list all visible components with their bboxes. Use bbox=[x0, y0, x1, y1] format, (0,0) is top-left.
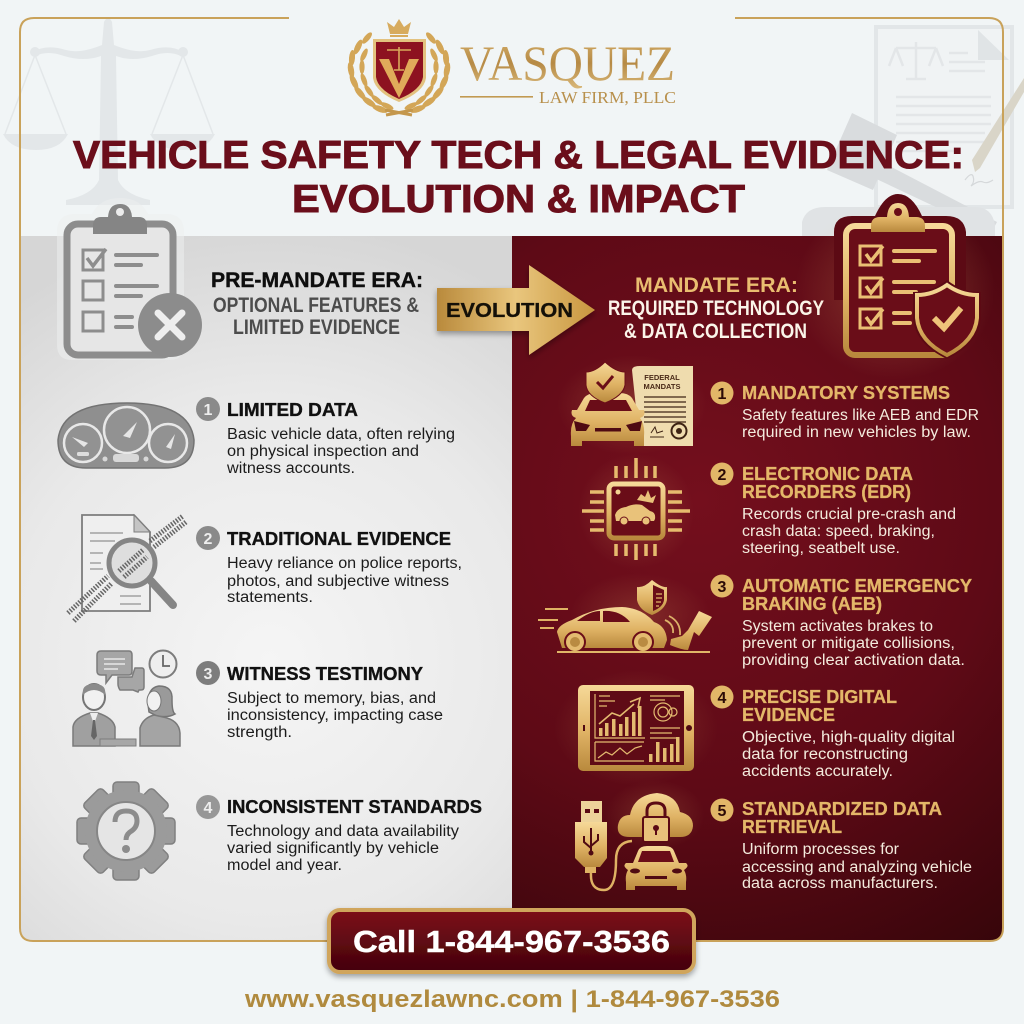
body text bbox=[742, 729, 955, 780]
icon: tablet with charts bbox=[554, 670, 718, 786]
right header bbox=[608, 274, 824, 343]
body text: Safety features like AEB and EDR bbox=[742, 407, 979, 424]
right header: MANDATE ERA: bbox=[635, 274, 798, 297]
body text: crash data: speed, braking, bbox=[742, 523, 935, 540]
badge 4 bbox=[196, 795, 220, 819]
panel: pre-mandate era bbox=[21, 236, 512, 941]
body text: on physical inspection and bbox=[227, 443, 419, 460]
body text: steering, seatbelt use. bbox=[742, 540, 900, 557]
body text bbox=[227, 823, 459, 874]
heading: WITNESS TESTIMONY bbox=[227, 663, 424, 684]
body text: data for reconstructing bbox=[742, 746, 908, 763]
body text: Heavy reliance on police reports, bbox=[227, 555, 462, 572]
body text: varied significantly by vehicle bbox=[227, 840, 439, 857]
badge 1 bbox=[710, 382, 734, 404]
body text: data across manufacturers. bbox=[742, 875, 938, 892]
right header: REQUIRED TECHNOLOGY bbox=[608, 297, 824, 320]
heading: RECORDERS (EDR) bbox=[742, 481, 911, 502]
badge 1: 1 bbox=[718, 386, 727, 403]
badge 3: 3 bbox=[718, 579, 727, 596]
logo bbox=[347, 19, 676, 115]
item: precise digital evidence bbox=[554, 670, 955, 786]
heading: ELECTRONIC DATA bbox=[742, 463, 913, 484]
body text: accessing and analyzing vehicle bbox=[742, 859, 972, 876]
body text: witness accounts. bbox=[226, 460, 355, 477]
badge 2 bbox=[710, 462, 734, 486]
heading bbox=[742, 575, 973, 614]
logo wreath bbox=[347, 31, 451, 115]
heading: STANDARDIZED DATA bbox=[742, 798, 942, 819]
badge 3 bbox=[710, 574, 734, 598]
left header: PRE-MANDATE ERA: bbox=[211, 269, 423, 292]
logo name: VASQUEZ bbox=[460, 35, 675, 91]
badge 4: 4 bbox=[204, 800, 213, 817]
body text bbox=[742, 407, 979, 441]
badge 3: 3 bbox=[204, 666, 213, 683]
badge 4 bbox=[710, 686, 734, 708]
logo firm line: LAW FIRM, PLLC bbox=[539, 88, 676, 107]
body text bbox=[742, 506, 956, 557]
body text: Uniform processes for bbox=[742, 841, 899, 858]
logo shield bbox=[373, 39, 426, 102]
body text bbox=[742, 618, 965, 669]
logo crown bbox=[387, 19, 411, 37]
watermark: scales of justice bbox=[3, 18, 215, 205]
icon: car, shield, federal mandates document: FEDERAL bbox=[644, 373, 680, 382]
title: VEHICLE SAFETY TECH & LEGAL EVIDENCE: bbox=[73, 134, 964, 177]
item: automatic emergency braking bbox=[538, 573, 973, 669]
body text: photos, and subjective witness bbox=[227, 573, 449, 590]
badge 5 bbox=[710, 798, 734, 822]
body text: Technology and data availability bbox=[227, 823, 459, 840]
title: EVOLUTION & IMPACT bbox=[292, 178, 745, 221]
body text bbox=[226, 426, 455, 477]
icon: car braking with shield and pedal bbox=[538, 573, 712, 657]
watermark: legal document, gavel and pen bbox=[802, 27, 1024, 236]
icon: gear with question mark bbox=[77, 782, 175, 880]
heading: RETRIEVAL bbox=[742, 816, 842, 837]
heading bbox=[742, 686, 897, 725]
body text: accidents accurately. bbox=[742, 763, 893, 780]
icon: two people talking bbox=[73, 650, 180, 746]
body text: System activates brakes to bbox=[742, 618, 933, 635]
heading bbox=[742, 463, 913, 502]
item: inconsistent standards bbox=[77, 782, 482, 880]
item: electronic data recorders bbox=[578, 453, 956, 569]
heading: AUTOMATIC EMERGENCY bbox=[742, 575, 973, 596]
body text: model and year. bbox=[227, 857, 342, 874]
item: traditional evidence bbox=[68, 515, 462, 621]
left header: OPTIONAL FEATURES & bbox=[213, 294, 419, 317]
arrow: evolution bbox=[437, 265, 595, 355]
icon: car, shield, federal mandates document bbox=[557, 355, 707, 455]
badge 2 bbox=[196, 526, 220, 550]
item: standardized data retrieval bbox=[575, 780, 972, 892]
icon: USB, cloud lock and car bbox=[575, 780, 705, 890]
body text: providing clear activation data. bbox=[742, 652, 965, 669]
heading: LIMITED DATA bbox=[227, 399, 358, 420]
heading: TRADITIONAL EVIDENCE bbox=[227, 528, 451, 549]
badge 5: 5 bbox=[718, 803, 727, 820]
call button bbox=[329, 910, 694, 972]
heading bbox=[742, 798, 942, 837]
panel: mandate era bbox=[512, 236, 1003, 941]
body text bbox=[742, 841, 972, 892]
badge 1 bbox=[196, 397, 220, 421]
body text: prevent or mitigate collisions, bbox=[742, 635, 955, 652]
body text: Basic vehicle data, often relying bbox=[227, 426, 455, 443]
icon: document, magnifier, tire tracks bbox=[68, 515, 186, 621]
call button: Call 1-844-967-3536 bbox=[353, 924, 670, 959]
body text: inconsistency, impacting case bbox=[227, 707, 443, 724]
icon: gold clipboard with shield bbox=[795, 194, 995, 380]
heading: EVIDENCE bbox=[742, 704, 835, 725]
icon: grey clipboard with X bbox=[57, 198, 202, 360]
icon: car, shield, federal mandates document: MANDATS bbox=[644, 382, 680, 391]
logo rule bbox=[460, 96, 533, 98]
heading: PRECISE DIGITAL bbox=[742, 686, 897, 707]
icon: dashboard gauges bbox=[58, 403, 194, 468]
body text bbox=[227, 555, 462, 606]
right header: & DATA COLLECTION bbox=[624, 320, 807, 343]
body text bbox=[227, 690, 443, 741]
icon: EDR chip with crash car bbox=[578, 453, 694, 569]
heading: MANDATORY SYSTEMS bbox=[742, 382, 950, 403]
body text: strength. bbox=[227, 724, 292, 741]
body text: Subject to memory, bias, and bbox=[227, 690, 436, 707]
title bbox=[73, 134, 964, 221]
left header bbox=[211, 269, 423, 339]
badge 2: 2 bbox=[718, 467, 727, 484]
arrow: evolution: EVOLUTION bbox=[446, 299, 573, 322]
badge 1: 1 bbox=[204, 402, 213, 419]
footer contact line: www.vasquezlawnc.com | 1-844-967-3536 bbox=[244, 986, 780, 1013]
heading: INCONSISTENT STANDARDS bbox=[227, 796, 482, 817]
body text: Records crucial pre-crash and bbox=[742, 506, 956, 523]
item: limited data bbox=[58, 397, 455, 477]
badge 2: 2 bbox=[204, 531, 213, 548]
body text: required in new vehicles by law. bbox=[742, 424, 971, 441]
badge 4: 4 bbox=[718, 690, 727, 707]
heading: BRAKING (AEB) bbox=[742, 593, 882, 614]
badge 3 bbox=[196, 661, 220, 685]
body text: Objective, high-quality digital bbox=[742, 729, 955, 746]
item: witness testimony bbox=[73, 650, 443, 746]
left header: LIMITED EVIDENCE bbox=[233, 316, 400, 339]
item: mandatory systems bbox=[557, 355, 979, 455]
body text: statements. bbox=[227, 589, 313, 606]
